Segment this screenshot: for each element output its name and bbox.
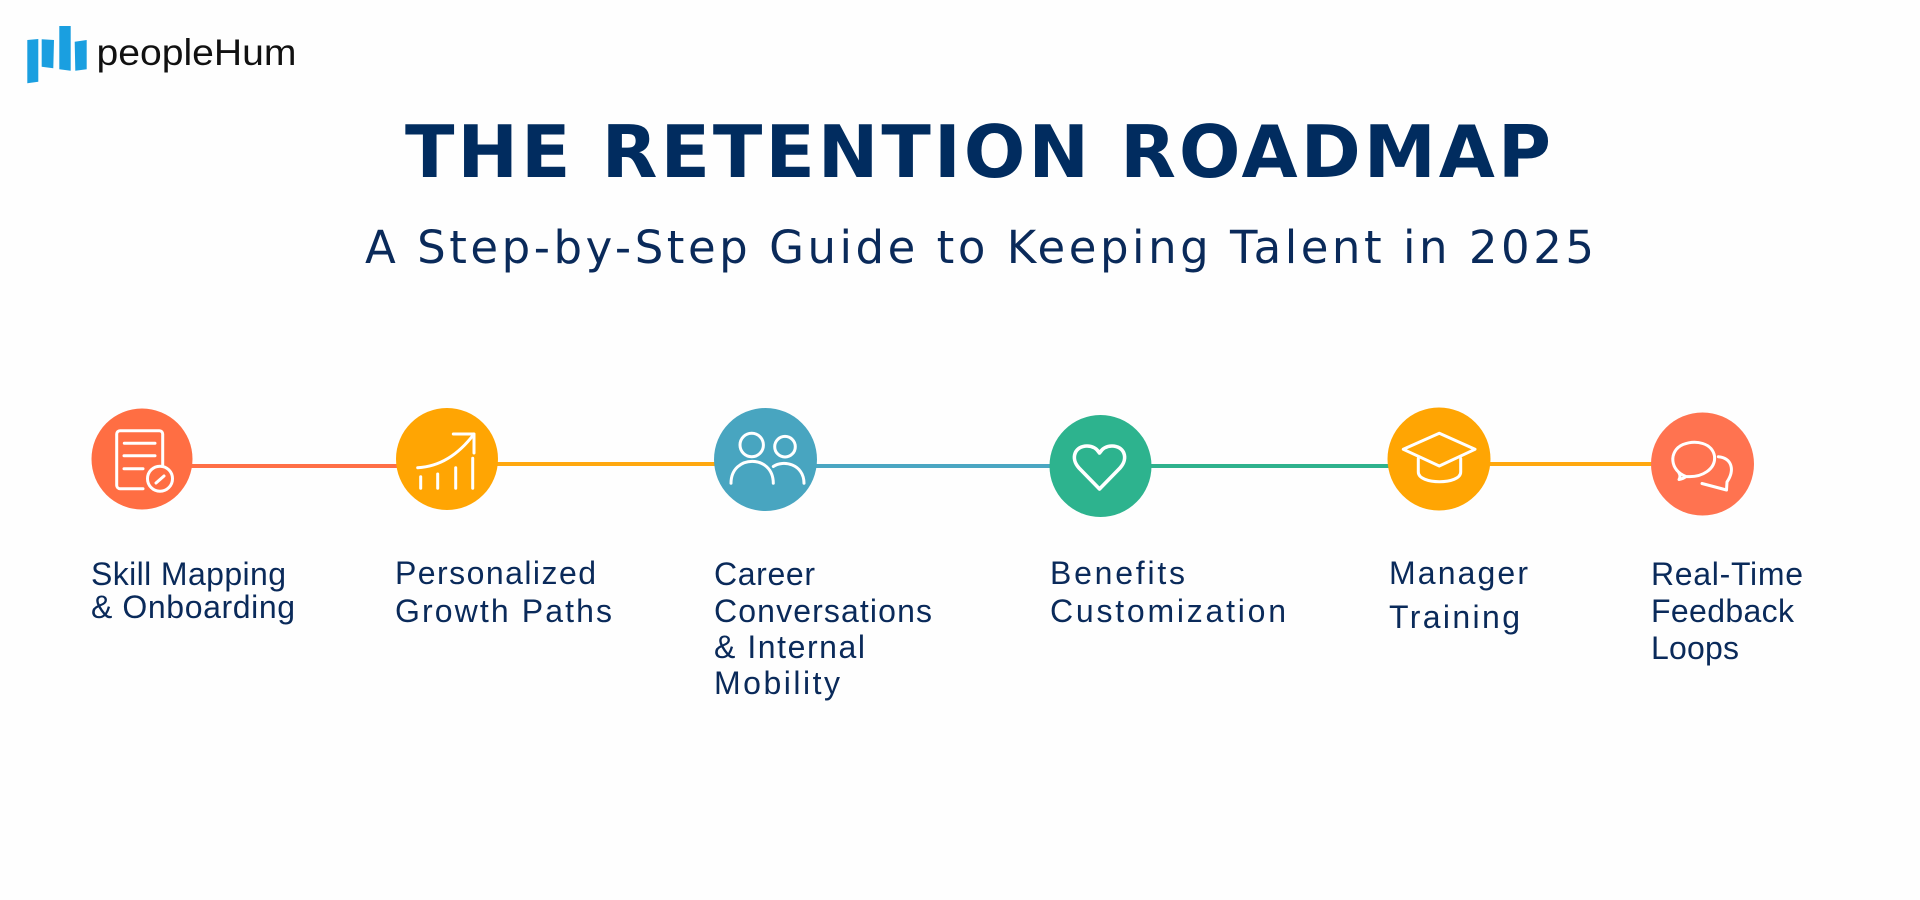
icon: chat bubbles: [1651, 412, 1754, 516]
step 4: benefits: [1050, 415, 1286, 629]
icon: two people: [714, 408, 817, 511]
label: skill mapping: Skill Mapping: [91, 556, 286, 592]
label: growth paths: Personalized: [395, 555, 596, 591]
label: skill mapping: & Onboarding: [91, 589, 295, 625]
step 1: skill mapping: [91, 408, 295, 625]
title: THE RETENTION ROADMAP: [405, 111, 1551, 195]
label: feedback loops: Real-Time: [1651, 556, 1803, 592]
label: career conversations: Career: [714, 556, 815, 592]
step 5: manager training: [1388, 408, 1528, 635]
label: career conversations: Mobility: [714, 665, 840, 701]
step 6: feedback loops: [1651, 412, 1803, 666]
label: growth paths: Growth Paths: [395, 593, 612, 629]
roadmap connector lines: [190, 462, 1653, 468]
label: manager training: Manager: [1389, 555, 1528, 591]
step 2: growth paths: [395, 408, 612, 629]
label: benefits: Customization: [1050, 593, 1286, 629]
label: feedback loops: Feedback: [1651, 593, 1795, 629]
label: career conversations: & Internal: [714, 629, 865, 665]
label: feedback loops: Loops: [1651, 630, 1739, 666]
icon: graduation cap: [1388, 408, 1490, 510]
icon: logo bars: [27, 26, 87, 83]
label: career conversations: Conversations: [714, 593, 932, 629]
subtitle: A Step-by-Step Guide to Keeping Talent in 2025: [365, 221, 1594, 274]
logo: peopleHum: [27, 26, 297, 83]
label: manager training: Training: [1389, 599, 1520, 635]
icon: heart: [1050, 415, 1152, 517]
step 3: career conversations: [714, 408, 932, 701]
label: benefits: Benefits: [1050, 555, 1185, 591]
logo wordmark: peopleHum: [96, 32, 296, 73]
icon: document with badge: [92, 408, 192, 510]
icon: growth chart: [396, 408, 498, 510]
